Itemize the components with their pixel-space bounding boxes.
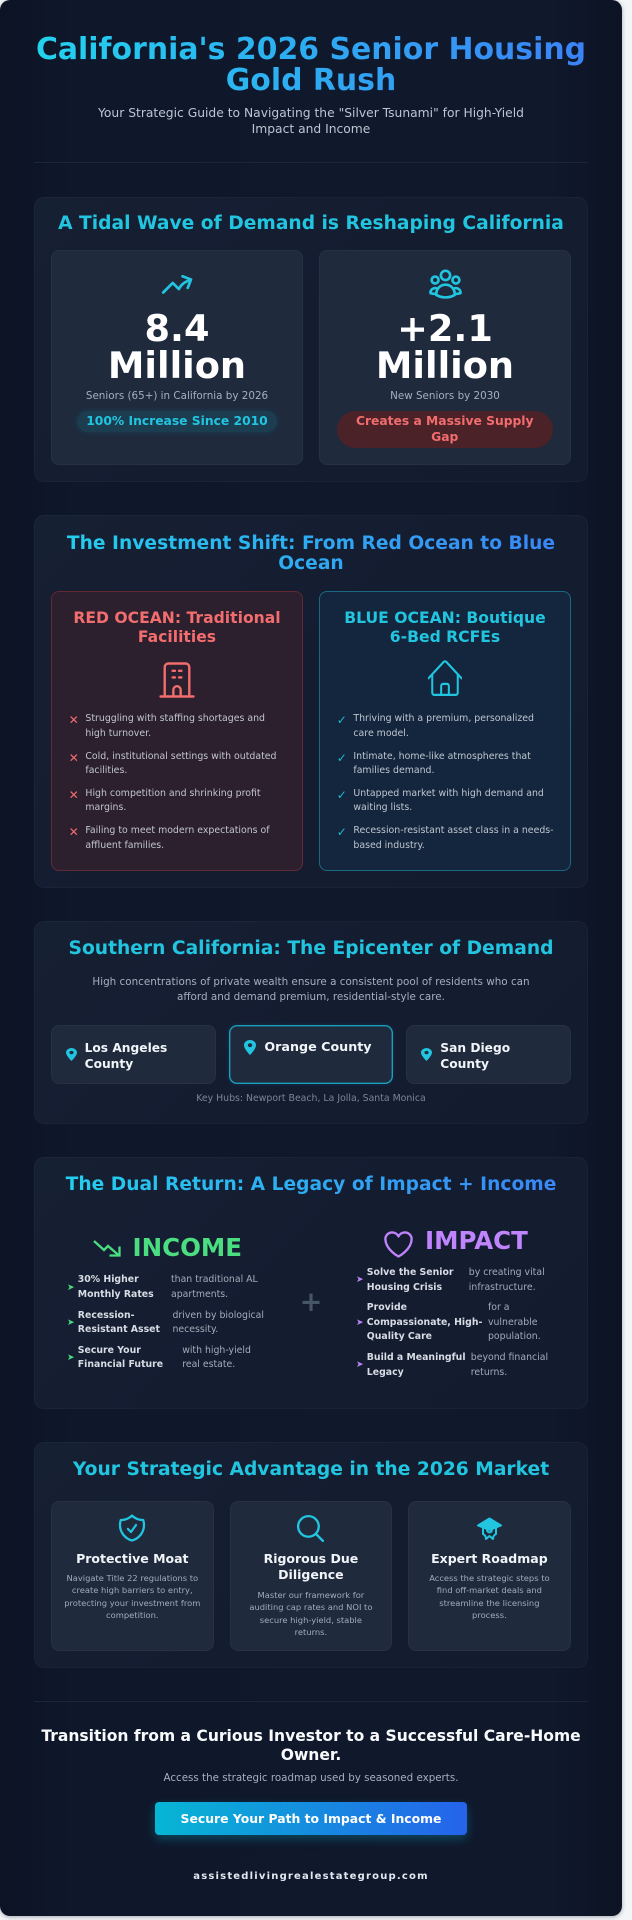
card description: competition. (106, 1610, 159, 1620)
county name: County (85, 1057, 133, 1071)
title: California's 2026 Senior Housing (36, 32, 586, 67)
impact point 2: Compassionate, High- (367, 1316, 482, 1328)
card description: Access the strategic steps to (429, 1573, 550, 1583)
icon: user group (429, 270, 462, 299)
stat card: 8.4 million (51, 250, 303, 465)
key hubs: Key Hubs: Newport Beach, La Jolla, Santa Monica (196, 1093, 426, 1104)
income point 1: apartments. (171, 1289, 228, 1300)
plus sign: + (300, 1287, 322, 1318)
income point 3 (78, 1345, 251, 1370)
county name: Los Angeles (85, 1040, 167, 1054)
item: families demand. (353, 765, 434, 776)
item: margins. (85, 802, 126, 813)
income point 3: with high-yield (182, 1345, 251, 1356)
pill: supply gap: Creates a Massive Supply (356, 414, 534, 428)
income point 3: Secure Your (78, 1345, 141, 1356)
icon: pin (421, 1048, 432, 1061)
arrow: ➤ (356, 1275, 364, 1285)
county: san diego (406, 1025, 571, 1084)
item (337, 713, 534, 739)
red ocean title (73, 609, 281, 646)
paragraph: afford and demand premium, residential-style care. (177, 991, 445, 1003)
item (69, 825, 270, 851)
pill: 100% increase: 100% Increase Since 2010 (86, 414, 268, 428)
red ocean title: RED OCEAN: Traditional (73, 609, 281, 627)
income point 2 (78, 1310, 264, 1335)
card description: returns. (295, 1627, 327, 1637)
website footer: assistedlivingrealestategroup.com (193, 1870, 429, 1882)
card title: Protective Moat (76, 1551, 189, 1566)
item: affluent families. (85, 840, 164, 851)
impact point 1: infrastructure. (469, 1282, 536, 1292)
impact point 3: Build a Meaningful (367, 1352, 466, 1363)
card title: Expert Roadmap (431, 1551, 548, 1566)
red ocean list: ✕ (69, 713, 79, 727)
county: orange (highlighted) (228, 1025, 393, 1084)
call to action heading: Transition from a Curious Investor to a Successful Care-Home (41, 1727, 581, 1745)
card title (264, 1551, 358, 1582)
heading: The Investment Shift: From Red Ocean to Blue (67, 533, 555, 554)
stat number: 8.4 (144, 306, 210, 350)
heading: Southern California: The Epicenter of Demand (69, 938, 553, 959)
blue ocean list: ✓ (337, 713, 347, 727)
red ocean list: ✕ (69, 788, 79, 802)
arrow: ➤ (356, 1360, 364, 1370)
red ocean list (69, 713, 276, 851)
income point 1: Monthly Rates (78, 1289, 154, 1300)
button (155, 1802, 467, 1835)
icon: magnifier (296, 1515, 324, 1542)
income point 2: driven by biological (172, 1310, 264, 1321)
card description: create high barriers to entry, (72, 1585, 193, 1595)
impact point 3: beyond financial (471, 1352, 548, 1363)
blue ocean list: ✓ (337, 825, 347, 839)
impact point 2 (367, 1302, 541, 1342)
card: expert roadmap (408, 1501, 571, 1651)
icon: building (159, 662, 195, 698)
income point 1: than traditional AL (171, 1274, 258, 1285)
impact point 1: Solve the Senior (367, 1267, 454, 1278)
income heading: INCOME (132, 1233, 242, 1262)
call to action heading (0, 1727, 622, 1764)
income point 2: Recession- (78, 1310, 134, 1321)
item (337, 788, 544, 813)
impact point 2: Provide (367, 1302, 407, 1313)
item (69, 788, 261, 813)
heading: Your Strategic Advantage in the 2026 Market (73, 1459, 549, 1480)
income point 3: Financial Future (78, 1359, 163, 1370)
county name: County (440, 1057, 489, 1071)
subtitle: Your Strategic Guide to Navigating the "Silver Tsunami" for High-Yield (98, 106, 524, 120)
card description (64, 1573, 200, 1620)
impact point 1: Housing Crisis (367, 1282, 442, 1292)
stat number (376, 306, 514, 386)
card description: Master our framework for (258, 1590, 364, 1600)
impact heading: IMPACT (425, 1226, 528, 1255)
subtitle: Impact and Income (252, 122, 370, 136)
item (69, 713, 265, 739)
pill: supply gap: Gap (431, 430, 458, 444)
stat number: Million (108, 344, 246, 386)
icon: home (428, 660, 462, 696)
blue ocean title: BLUE OCEAN: Boutique (344, 609, 546, 627)
item: care model. (353, 728, 409, 739)
impact point 3: Legacy (367, 1366, 404, 1378)
item: Untapped market with high demand and (353, 788, 544, 799)
county name (85, 1040, 167, 1071)
item: Intimate, home-like atmospheres that (353, 751, 531, 762)
item: High competition and shrinking profit (85, 788, 261, 799)
card description: Navigate Title 22 regulations to (66, 1573, 198, 1583)
income point 2: Resistant Asset (78, 1324, 160, 1335)
call to action heading: Owner. (281, 1746, 341, 1764)
card description: find off-market deals and (437, 1585, 542, 1595)
icon: trending up (162, 274, 192, 294)
county: los angeles (51, 1025, 216, 1084)
item: waiting lists. (353, 802, 412, 813)
arrow: ➤ (356, 1318, 364, 1328)
panel: southern california (34, 921, 588, 1124)
icon: pin (66, 1048, 77, 1061)
item: facilities. (85, 765, 127, 776)
county name (440, 1040, 510, 1071)
card: protective moat (51, 1501, 214, 1651)
pill: 100% increase (77, 411, 277, 432)
item (69, 751, 276, 776)
heading: Ocean (278, 553, 344, 574)
item: Struggling with staffing shortages and (85, 713, 265, 724)
income column (67, 1233, 264, 1370)
stat label: Seniors (65+) in California by 2026 (86, 390, 268, 402)
icon: graduation cap (476, 1517, 503, 1541)
item: based industry. (353, 840, 425, 851)
icon: pin (244, 1040, 256, 1055)
panel: dual return (34, 1157, 588, 1409)
blue ocean list: ✓ (337, 788, 347, 802)
pill: supply gap (336, 411, 553, 448)
card: due diligence (230, 1501, 392, 1651)
paragraph (92, 976, 530, 1003)
red ocean card (51, 591, 303, 871)
county name: Orange County (264, 1039, 372, 1054)
item (337, 751, 531, 776)
card description (408, 1572, 571, 1622)
item: Thriving with a premium, personalized (353, 713, 534, 724)
title (34, 34, 588, 96)
title: Gold Rush (226, 63, 396, 98)
card title: Diligence (278, 1567, 344, 1582)
impact point 1: by creating vital (469, 1267, 545, 1278)
item: Recession-resistant asset class in a needs- (353, 825, 554, 836)
paragraph: High concentrations of private wealth ensure a consistent pool of residents who can (92, 976, 530, 988)
icon: trending down (93, 1240, 121, 1257)
impact point 2: Quality Care (367, 1331, 432, 1342)
panel: investment shift (34, 515, 588, 888)
card description: process. (472, 1610, 507, 1620)
icon: heart (384, 1231, 413, 1258)
panel: strategic advantage (34, 1442, 588, 1668)
stat number: +2.1 (397, 306, 493, 350)
blue ocean list: ✓ (337, 751, 347, 765)
card description: protecting your investment from (64, 1598, 200, 1608)
blue ocean title (344, 609, 546, 646)
impact point 2: vulnerable (488, 1316, 538, 1328)
card description: auditing cap rates and NOI to (249, 1602, 372, 1612)
red ocean list: ✕ (69, 825, 79, 839)
card description: streamline the licensing (439, 1598, 540, 1608)
income point 3: real estate. (182, 1359, 235, 1370)
impact point 3: returns. (471, 1366, 507, 1378)
income point 1: 30% Higher (78, 1274, 139, 1285)
blue ocean card (319, 591, 571, 871)
stat label: New Seniors by 2030 (390, 390, 500, 402)
item (337, 825, 554, 851)
red ocean title: Facilities (138, 628, 216, 646)
card description (249, 1590, 372, 1637)
impact point 1 (367, 1267, 545, 1292)
icon: shield (118, 1514, 146, 1542)
stat number: Million (376, 344, 514, 386)
impact column (356, 1226, 548, 1378)
subtitle (98, 106, 524, 136)
impact point 2: population. (488, 1331, 541, 1342)
blue ocean list (337, 713, 554, 851)
impact point 2: for a (488, 1302, 510, 1313)
arrow: ➤ (67, 1283, 75, 1293)
item: Cold, institutional settings with outdated (85, 751, 276, 762)
item: Failing to meet modern expectations of (85, 825, 270, 836)
income point 2: necessity. (172, 1324, 218, 1335)
call to action subtext: Access the strategic roadmap used by seasoned experts. (164, 1772, 458, 1784)
red ocean list: ✕ (69, 751, 79, 765)
county name: San Diego (440, 1040, 510, 1054)
heading: The Dual Return: A Legacy of Impact + Income (66, 1174, 556, 1195)
item: high turnover. (85, 728, 151, 739)
heading (34, 534, 588, 575)
stat number (108, 306, 246, 386)
income point 1 (78, 1274, 258, 1300)
blue ocean title: 6-Bed RCFEs (390, 628, 500, 646)
stat card: +2.1 million (319, 250, 571, 465)
card title: Rigorous Due (264, 1551, 358, 1566)
impact point 3 (367, 1352, 548, 1378)
heading: A Tidal Wave of Demand is Reshaping California (58, 213, 564, 234)
button: Secure Your Path to Impact & Income (181, 1811, 441, 1826)
arrow: ➤ (67, 1353, 75, 1363)
arrow: ➤ (67, 1318, 75, 1328)
card description: secure high-yield, stable (260, 1615, 362, 1625)
panel: tidal wave of demand (34, 197, 588, 482)
